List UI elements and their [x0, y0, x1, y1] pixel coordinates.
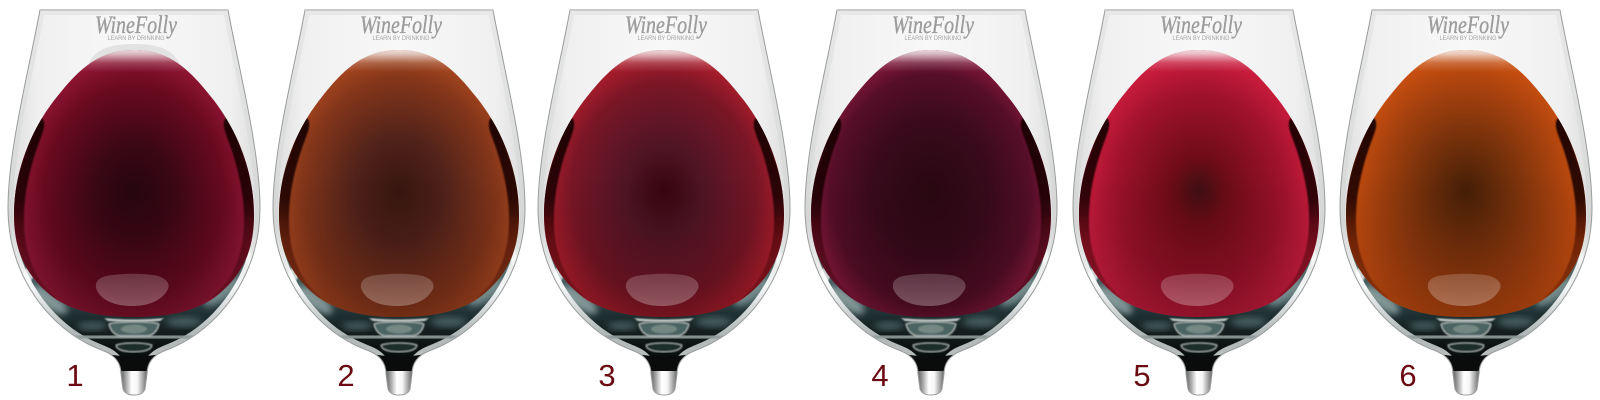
logo: WineFolly [1427, 12, 1510, 39]
logo: WineFolly [625, 12, 708, 39]
logo: WineFolly [360, 12, 443, 39]
glass 2 [269, 10, 529, 400]
glass 3 [534, 10, 794, 400]
glass 1 [4, 10, 264, 400]
meniscus [88, 44, 180, 64]
logo: WineFolly [1160, 12, 1243, 39]
tagline: LEARN BY DRINKING [904, 36, 962, 42]
number 5: 5 [1133, 358, 1151, 393]
glass 4 [801, 10, 1061, 400]
logo: WineFolly [892, 12, 975, 39]
number 2: 2 [337, 358, 355, 393]
number 3: 3 [598, 358, 616, 393]
tagline: LEARN BY DRINKING [1440, 36, 1497, 42]
logo: WineFolly [95, 12, 178, 39]
number 6: 6 [1399, 358, 1417, 393]
tagline: LEARN BY DRINKING [108, 36, 165, 42]
glass 5 [1069, 10, 1329, 400]
glass 6 [1336, 10, 1596, 400]
number 1: 1 [66, 358, 84, 393]
tagline: LEARN BY DRINKING [1172, 36, 1230, 42]
number 4: 4 [871, 358, 889, 393]
tagline: LEARN BY DRINKING [638, 36, 695, 42]
tagline: LEARN BY DRINKING [372, 36, 430, 42]
